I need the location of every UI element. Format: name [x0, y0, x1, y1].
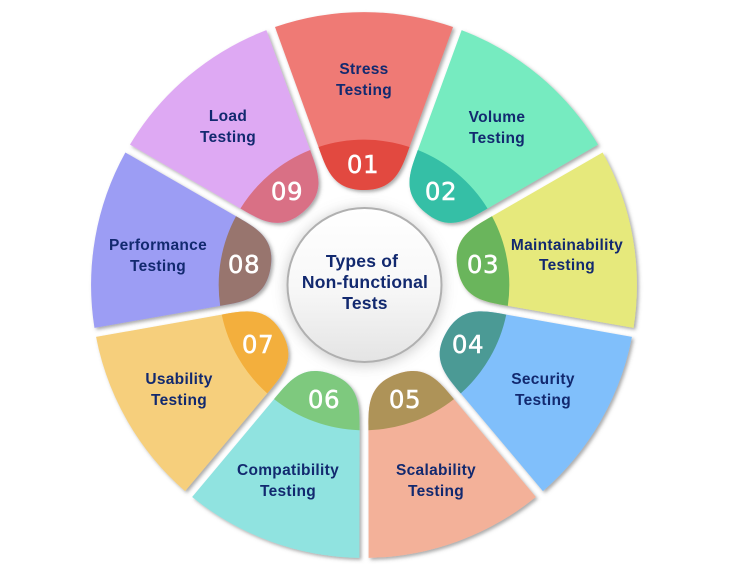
wedge 06 — [187, 344, 415, 572]
number 05: 05 — [389, 385, 421, 414]
wedge 04 — [402, 255, 645, 499]
wedge 08 — [80, 150, 286, 356]
segment 05: Scalability Testing — [313, 344, 541, 572]
label 07: Testing — [151, 392, 207, 409]
segment 09: Load Testing — [120, 19, 371, 269]
segment 01: Stress Testing — [275, 12, 453, 190]
hub title: Tests — [342, 293, 388, 313]
wedge 09 — [120, 19, 371, 269]
label 01: Stress — [339, 61, 389, 78]
number 04: 04 — [452, 330, 484, 359]
number 02: 02 — [425, 177, 457, 206]
label 05: Scalability — [396, 462, 476, 479]
number 09: 09 — [271, 177, 303, 206]
label 09: Load — [209, 108, 247, 125]
segment 08: Performance Testing — [80, 150, 286, 356]
wedge 05 — [313, 344, 541, 572]
hub title: Types of — [326, 251, 398, 271]
label 04: Testing — [515, 392, 571, 409]
hub circle — [288, 208, 442, 362]
hub title: Non-functional — [302, 272, 428, 292]
wedge 01 — [275, 12, 453, 190]
label 06: Testing — [260, 483, 316, 500]
number 06: 06 — [308, 385, 340, 414]
number 07: 07 — [242, 330, 274, 359]
segment 03: Maintainability Testing — [442, 150, 648, 356]
label 04: Security — [511, 371, 575, 388]
label 08: Testing — [130, 258, 186, 275]
label 03: Maintainability — [511, 237, 623, 254]
wedge 07 — [83, 255, 326, 499]
segment 04: Security Testing — [402, 255, 645, 499]
segment 06: Compatibility Testing — [187, 344, 415, 572]
label 03: Testing — [539, 257, 595, 274]
segment 02: Volume Testing — [357, 19, 608, 269]
label 02: Volume — [469, 109, 525, 126]
segment 07: Usability Testing — [83, 255, 326, 499]
number 03: 03 — [467, 250, 499, 279]
wedge 03 — [442, 150, 648, 356]
label 08: Performance — [109, 237, 207, 254]
number 01: 01 — [347, 150, 379, 179]
number 08: 08 — [228, 250, 260, 279]
label 07: Usability — [145, 371, 213, 388]
label 05: Testing — [408, 483, 464, 500]
label 02: Testing — [469, 130, 525, 147]
label 01: Testing — [336, 82, 392, 99]
label 06: Compatibility — [237, 462, 339, 479]
wedge 02 — [357, 19, 608, 269]
label 09: Testing — [200, 129, 256, 146]
center hub — [288, 208, 442, 362]
